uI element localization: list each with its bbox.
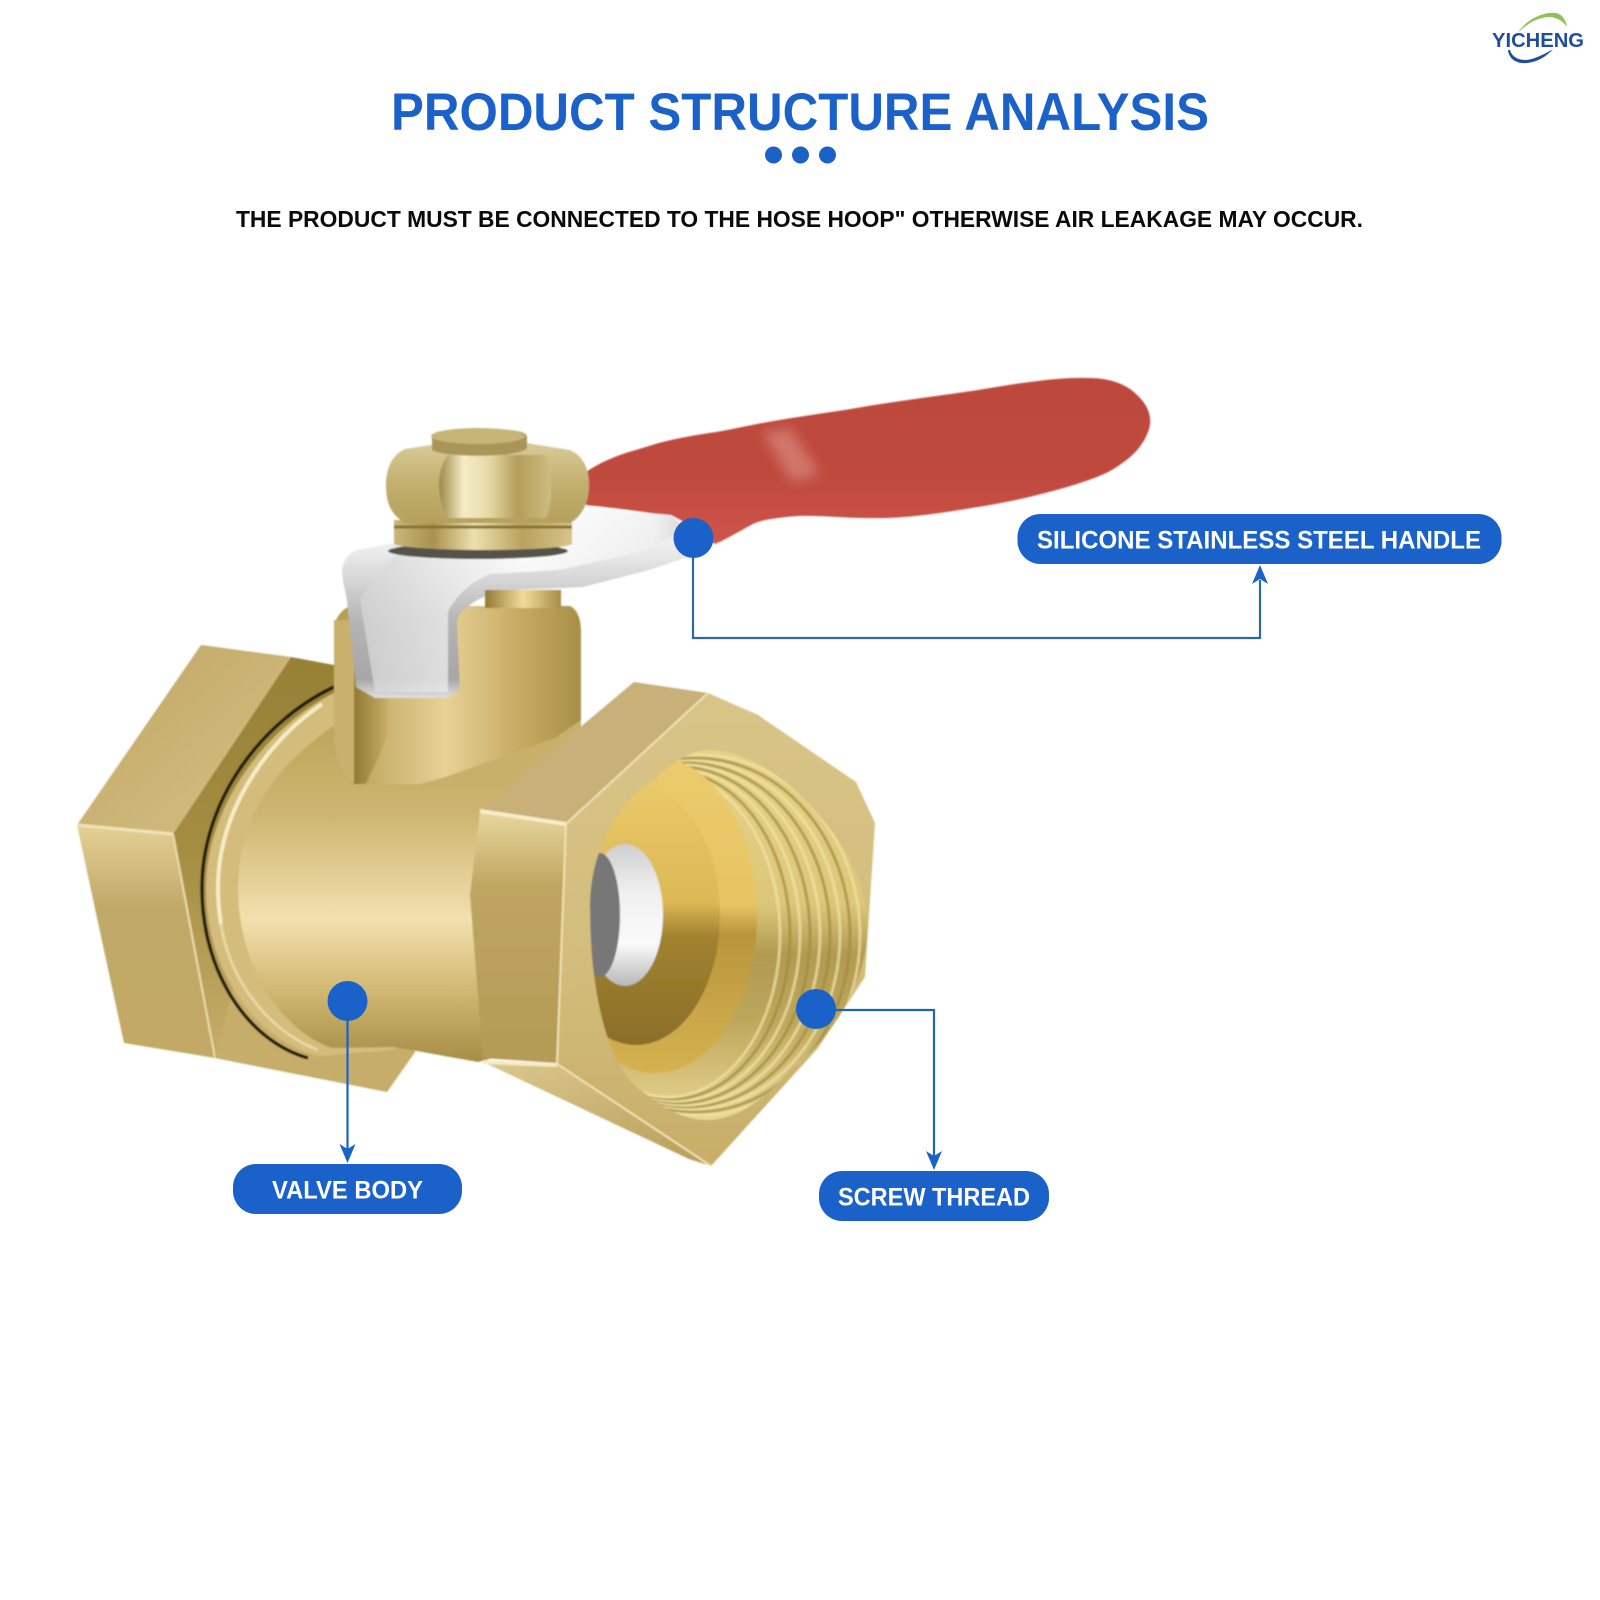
handle highlight xyxy=(762,428,820,482)
right hex nut xyxy=(470,682,875,1166)
label pill xyxy=(819,1171,1049,1221)
ball bore xyxy=(587,844,663,986)
logo green arc xyxy=(1518,13,1567,33)
screw thread rings xyxy=(644,753,862,1116)
leader arrow xyxy=(693,556,1268,638)
marker dot xyxy=(328,981,368,1021)
callout: valve body xyxy=(233,981,462,1214)
top cap xyxy=(432,429,527,456)
brass ball valve illustration xyxy=(77,378,1150,1166)
hex bonnet nut xyxy=(386,428,589,559)
label pill xyxy=(233,1164,462,1214)
logo blue arc xyxy=(1508,49,1553,63)
sealing ring and collar xyxy=(202,686,400,1058)
left hex nut xyxy=(77,645,415,1092)
silver lever xyxy=(342,508,693,698)
label pill xyxy=(1018,514,1502,564)
handle xyxy=(586,378,1150,544)
logo wordmark: YICHENG xyxy=(1492,29,1584,52)
callout: silicone stainless steel handle xyxy=(674,514,1502,638)
threaded bore xyxy=(589,750,868,1120)
logo: YICHENG xyxy=(1492,13,1584,63)
collar xyxy=(394,520,572,550)
hex head xyxy=(386,442,589,523)
stem xyxy=(334,606,581,790)
inner bowl xyxy=(608,760,758,1074)
title: PRODUCT STRUCTURE ANALYSIS xyxy=(391,83,1209,142)
washer xyxy=(388,543,568,559)
label pill: SCREW THREAD xyxy=(838,1184,1030,1212)
neck under lever xyxy=(485,590,561,608)
hex centre facet xyxy=(439,455,551,518)
leader arrow xyxy=(340,1020,356,1163)
label pill: VALVE BODY xyxy=(272,1176,423,1204)
leader arrow xyxy=(830,1010,942,1170)
label pill: SILICONE STAINLESS STEEL HANDLE xyxy=(1037,526,1481,554)
valve body cylinder xyxy=(238,722,560,1062)
marker dot xyxy=(796,989,836,1029)
marker dot xyxy=(674,518,714,558)
callout: screw thread xyxy=(796,989,1049,1221)
subtitle warning: THE PRODUCT MUST BE CONNECTED TO THE HOSE HOOP" OTHERWISE AIR LEAKAGE MAY OCCUR. xyxy=(236,206,1363,232)
title decoration: three dots xyxy=(765,146,836,164)
